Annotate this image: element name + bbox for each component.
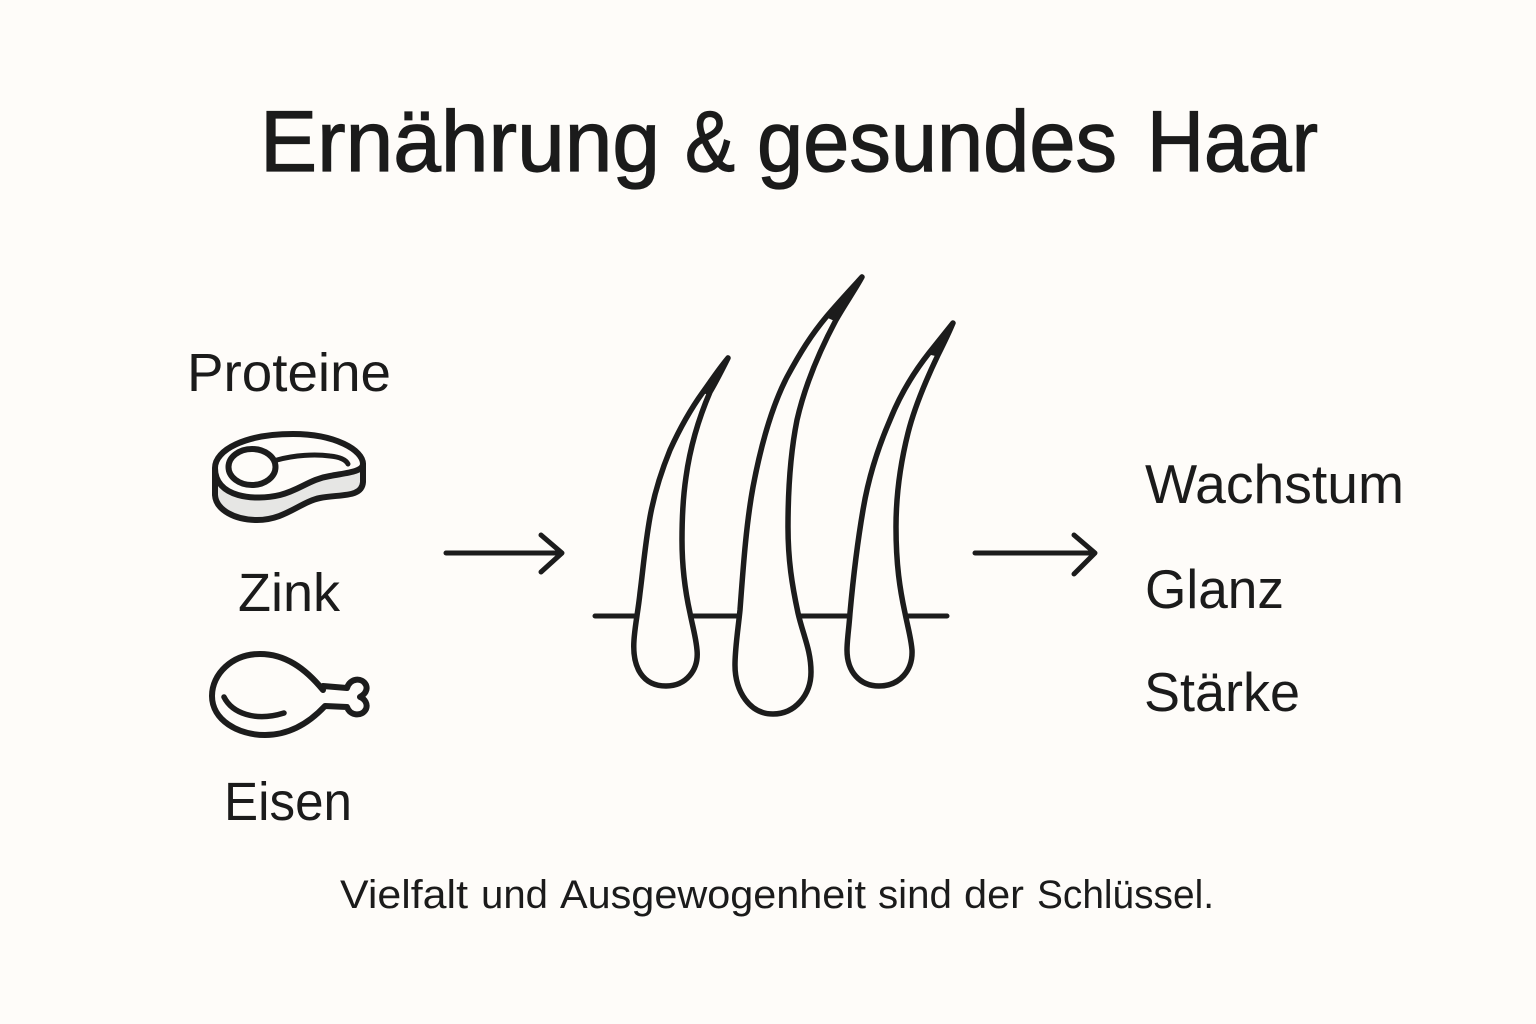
arrow: hair to benefits [975, 535, 1095, 574]
title: Ernährung [260, 94, 660, 190]
tagline: Schlüssel. [1037, 873, 1214, 917]
skin line [595, 614, 947, 618]
icon: steak [215, 434, 363, 520]
title: & [685, 94, 735, 190]
illustration: hair follicles [595, 277, 953, 714]
hair strand: left [634, 358, 728, 686]
label: Eisen: Eisen [224, 772, 352, 832]
icon: chicken leg [212, 654, 367, 735]
hair strand: right [847, 323, 953, 686]
title: Haar [1147, 94, 1318, 190]
tagline: Ausgewogenheit [560, 873, 866, 917]
label: Glanz: Glanz [1145, 558, 1284, 620]
label: Zink: Zink [238, 563, 341, 623]
tagline: der [964, 873, 1024, 917]
tagline: Vielfalt [340, 873, 468, 917]
panel: benefits [1144, 453, 1404, 723]
arrow: nutrients to hair [446, 535, 562, 572]
tagline: sind [878, 873, 952, 917]
hair strand: centre [735, 277, 862, 714]
panel: nutrients [187, 343, 391, 832]
label: Wachstum: Wachstum [1145, 453, 1404, 515]
tagline: und [481, 873, 548, 917]
label: Stärke: Stärke [1144, 661, 1300, 723]
title: gesundes [757, 94, 1117, 190]
label: Proteine: Proteine [187, 343, 391, 403]
